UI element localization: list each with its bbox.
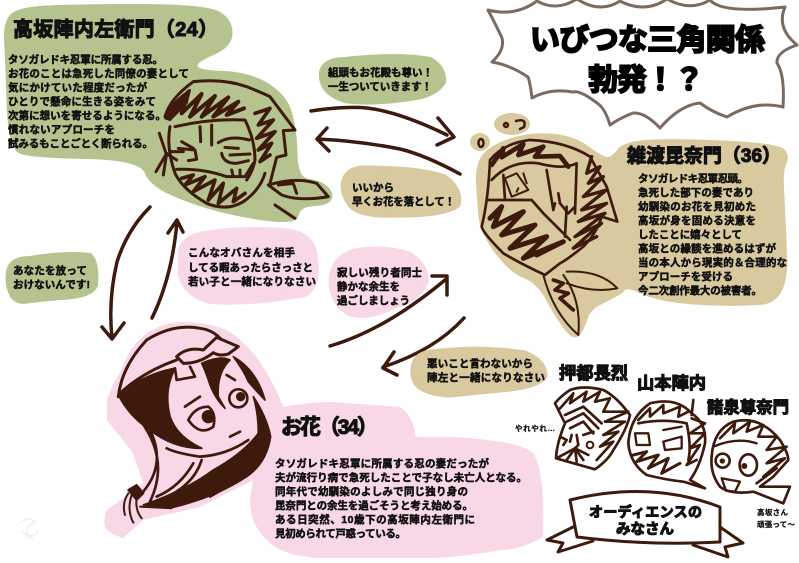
names: audience members: 山本陣内	[637, 373, 706, 393]
panel: Takasaka Jinnai Saemon	[4, 4, 332, 222]
panel: Zatto Konnamon	[470, 113, 788, 337]
names: audience members	[559, 363, 789, 417]
description: Zatto: したことに嬉々として	[638, 228, 742, 241]
speech bubble: green left: おけないんです!	[13, 279, 90, 291]
head: Yamamoto	[628, 400, 705, 488]
speech bubble: tan top: いいから	[352, 182, 394, 194]
small remark: cheering	[757, 507, 796, 529]
description: Ohana	[275, 457, 527, 540]
speech bubble: pink centre: してる暇あったらさっさと	[188, 262, 313, 274]
banner text: みなさん	[616, 521, 674, 538]
speech bubble: pink centre: こんなオバさんを相手	[188, 246, 296, 259]
arrow: Takasaka to Ohana	[102, 207, 150, 339]
description: Zatto: 高坂との縁談を進めるはずが	[638, 242, 776, 255]
head: Osato	[555, 387, 630, 469]
heading: Ohana: お花（34）	[281, 416, 378, 439]
description: Zatto: 幼馴染のお花を見初めた	[638, 200, 756, 213]
speech bubble: pink centre: 若い子と一緒になりなさい	[188, 275, 316, 288]
arrow: Zatto to Ohana	[383, 318, 464, 375]
speech bubble: green top: 一生ついていきます！	[328, 80, 432, 93]
speech bubble: green left: あなたを放って	[13, 264, 87, 277]
speech bubble: tan bottom: 陣左と一緒になりなさい	[427, 371, 545, 384]
character: Ohana head	[118, 327, 271, 523]
arrow: Ohana to Takasaka	[152, 220, 183, 318]
description: Takasaka: 試みるもことごとく断られる。	[8, 137, 153, 150]
speech bubble: tan bottom	[412, 348, 546, 396]
description: Zatto: 急死した部下の妻であり	[638, 186, 754, 199]
description: Ohana: タソガレドキ忍軍に所属する忍の妻だったが	[275, 457, 490, 470]
title text	[530, 24, 765, 97]
description: Zatto: 今二次創作最大の被害者。	[638, 284, 762, 297]
speech bubble: green top: 組頭もお花殿も尊い！	[328, 66, 433, 79]
description: Ohana: ある日突然、10歳下の高坂陣内左衛門に	[275, 513, 475, 526]
description: Zatto: 高坂が身を固める決意を	[638, 214, 756, 227]
arrow: Takasaka to Zatto	[311, 107, 454, 145]
small remark: yareyare: やれやれ…	[515, 423, 555, 433]
ribbon shape	[570, 491, 720, 543]
description: Takasaka: 慣れないアプローチを	[8, 123, 115, 136]
burst outline	[488, 0, 797, 128]
description: Ohana: 見初められて戸惑っている。	[275, 527, 406, 540]
speech bubble: green left	[8, 254, 96, 302]
pink blob background	[104, 322, 543, 558]
speech bubble: pink right: 寂しい残り者同士	[337, 266, 422, 279]
speech bubble: tan top: 早くお花を落として！	[352, 195, 455, 208]
names: audience members: 押都長烈	[559, 363, 628, 383]
description: Zatto	[638, 172, 787, 297]
faint signature	[20, 519, 38, 540]
head: Moroizumi	[711, 420, 790, 503]
panel: Ohana	[104, 322, 543, 558]
description: Takasaka	[8, 53, 189, 150]
speech bubble: tan bottom: 悪いこと言わないから	[427, 358, 533, 370]
description: Takasaka: 次第に想いを寄せるようになる。	[8, 109, 166, 122]
description: Takasaka: お花のことは急死した同僚の妻として	[8, 67, 189, 80]
description: Zatto: 当の本人から現実的＆合理的な	[638, 256, 787, 269]
small remark: cheering: 高坂さん	[757, 507, 788, 517]
banner: audience label	[547, 491, 743, 557]
character: Zatto head	[482, 140, 617, 335]
small remark: cheering: 頑張って〜	[757, 520, 796, 529]
arrow: Ohana to Zatto	[330, 276, 447, 346]
title burst	[488, 0, 797, 128]
description: Zatto: タソガレドキ忍軍忍頭。	[638, 172, 748, 185]
description: Takasaka: ひとりで懸命に生きる姿をみて	[8, 95, 156, 108]
speech bubble: tan top	[343, 168, 459, 215]
speech bubble: pink right	[330, 248, 427, 316]
speech bubble: green top	[322, 57, 443, 102]
tan blob background	[476, 133, 788, 337]
names: audience members: 諸泉尊奈門	[707, 398, 789, 417]
green blob background	[4, 4, 332, 222]
heading: Zatto: 雑渡昆奈門（36）	[627, 145, 781, 167]
description: Ohana: 夫が流行り病で急死したことで子なし未亡人となる。	[275, 471, 527, 484]
heading: Takasaka: 高坂陣内左衛門（24）	[13, 18, 218, 41]
characters: audience heads	[555, 387, 790, 503]
character: Takasaka head	[156, 81, 328, 218]
speech bubble: pink right: 静かな余生を	[337, 280, 400, 293]
speech bubble: pink centre	[180, 229, 317, 303]
arrow: Zatto to Takasaka	[317, 128, 460, 174]
description: Zatto: アプローチを受ける	[638, 270, 733, 283]
banner text	[589, 504, 702, 538]
description: Ohana: 昆奈門との余生を過ごそうと考え始める。	[275, 499, 473, 512]
banner text: オーディエンスの	[589, 504, 702, 520]
title text: 勃発！？	[588, 64, 704, 97]
description: Takasaka: 気にかけていた程度だったが	[8, 81, 148, 94]
title text: いびつな三角関係	[530, 24, 765, 57]
speech bubble: pink right: 過ごしましょう	[337, 294, 410, 307]
small sweat bubbles	[470, 113, 530, 151]
description: Ohana: 同年代で幼馴染のよしみで同じ独り身の	[275, 485, 468, 498]
description: Takasaka: タソガレドキ忍軍に所属する忍。	[8, 53, 163, 66]
